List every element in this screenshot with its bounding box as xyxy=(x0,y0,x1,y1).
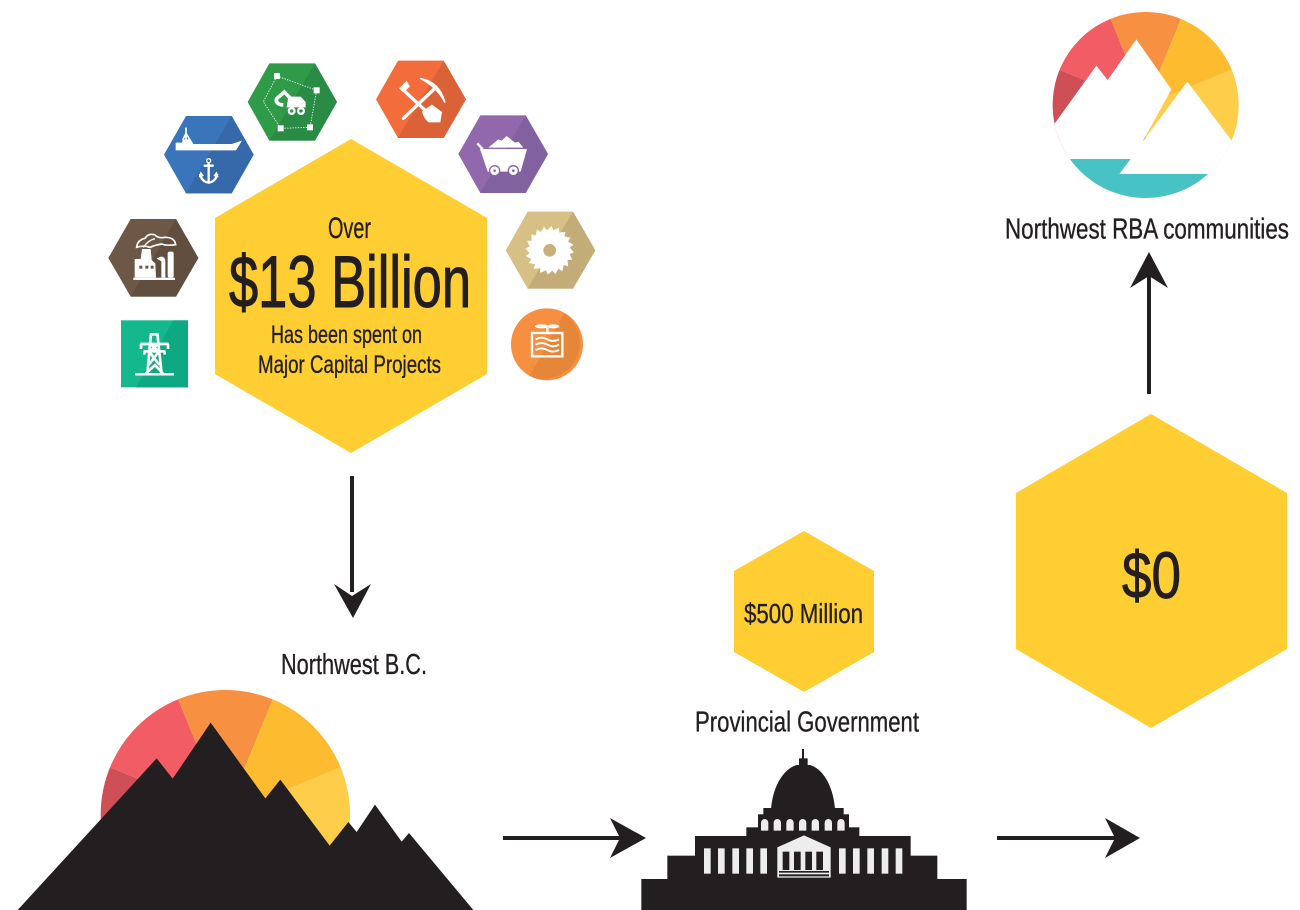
icon: ship and anchor on blue hexagon xyxy=(164,116,254,193)
icon group: right sector icons xyxy=(376,61,595,380)
arrow: to $0 column xyxy=(997,818,1140,858)
icon group: left sector icons xyxy=(108,63,337,387)
text: Over: Over xyxy=(328,212,371,245)
heading: Northwest B.C.: Northwest B.C. xyxy=(281,649,427,681)
icon: pick and shovel on orange hexagon xyxy=(376,61,466,138)
text: Major Capital Projects: Major Capital Projects xyxy=(258,351,441,379)
hexagon: $500 Million xyxy=(734,531,874,692)
heading: Provincial Government: Provincial Government xyxy=(695,706,919,738)
text: Has been spent on: Has been spent on xyxy=(271,321,422,349)
icon: saw blade on tan hexagon xyxy=(506,212,595,289)
arrow: to Provincial Government xyxy=(503,818,646,858)
panel: major capital projects hexagon xyxy=(215,139,487,453)
arrow: down to Northwest B.C. xyxy=(334,476,371,618)
illustration: government capitol building xyxy=(641,749,967,910)
icon: transmission tower on teal square xyxy=(121,320,188,387)
icon: detonator on orange circle xyxy=(511,308,583,380)
arrow: up to Northwest RBA communities xyxy=(1130,252,1168,394)
hexagon: $0: $0 xyxy=(1122,538,1181,612)
icon: ore cart on purple hexagon xyxy=(458,115,548,193)
hexagon: $0 xyxy=(1016,414,1287,728)
illustration: black mountains with sunrise xyxy=(18,670,473,910)
icon: mine excavator on green hexagon xyxy=(248,63,337,141)
illustration: Northwest RBA logo xyxy=(1052,12,1239,198)
icon: factory on brown hexagon xyxy=(108,219,198,297)
text: $13 Billion: $13 Billion xyxy=(229,242,471,323)
hexagon: $500 Million: $500 Million xyxy=(744,598,863,629)
